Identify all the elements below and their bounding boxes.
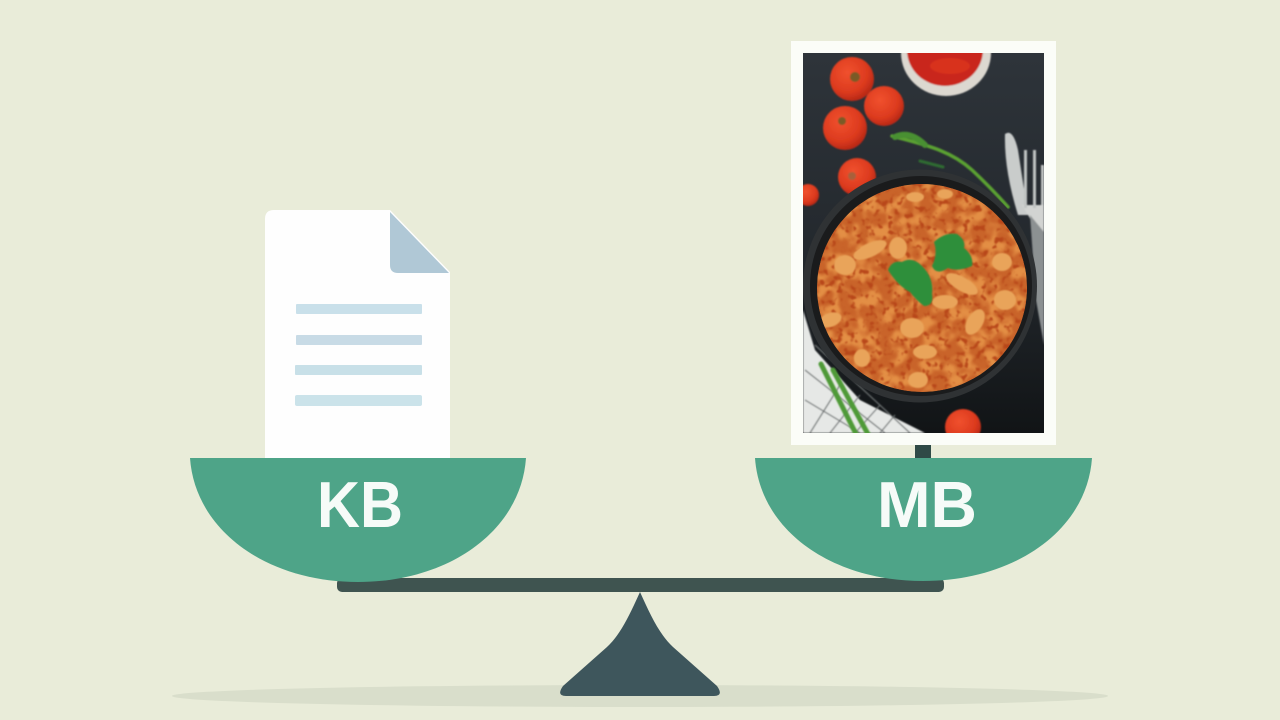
- green onions on towel: [821, 364, 869, 436]
- scale fulcrum: [560, 592, 720, 696]
- folded corner: [390, 212, 449, 273]
- rice: [815, 182, 1030, 394]
- checked towel: [803, 310, 925, 433]
- document text lines: [295, 304, 422, 406]
- photo connector post: [915, 444, 931, 459]
- white frame: [791, 41, 1056, 445]
- sauce bowl: [900, 53, 992, 97]
- knife and fork: [1005, 133, 1044, 345]
- photo: [803, 53, 1044, 433]
- tomatoes: [797, 57, 981, 445]
- document page: [265, 210, 450, 458]
- ground shadow: [172, 685, 1108, 707]
- left pan: KB: [190, 458, 526, 582]
- black bowl: [803, 170, 1037, 402]
- label: KB: KB: [317, 468, 403, 541]
- label: MB: MB: [877, 468, 977, 541]
- cilantro garnish: [888, 234, 972, 306]
- infographic: KB versus MB balance scale: [172, 41, 1108, 707]
- document icon: [265, 210, 450, 458]
- photo card: food image: [791, 10, 1056, 445]
- spring onion: [892, 135, 1008, 207]
- scale beam: [337, 578, 944, 592]
- right pan: MB: [755, 458, 1092, 581]
